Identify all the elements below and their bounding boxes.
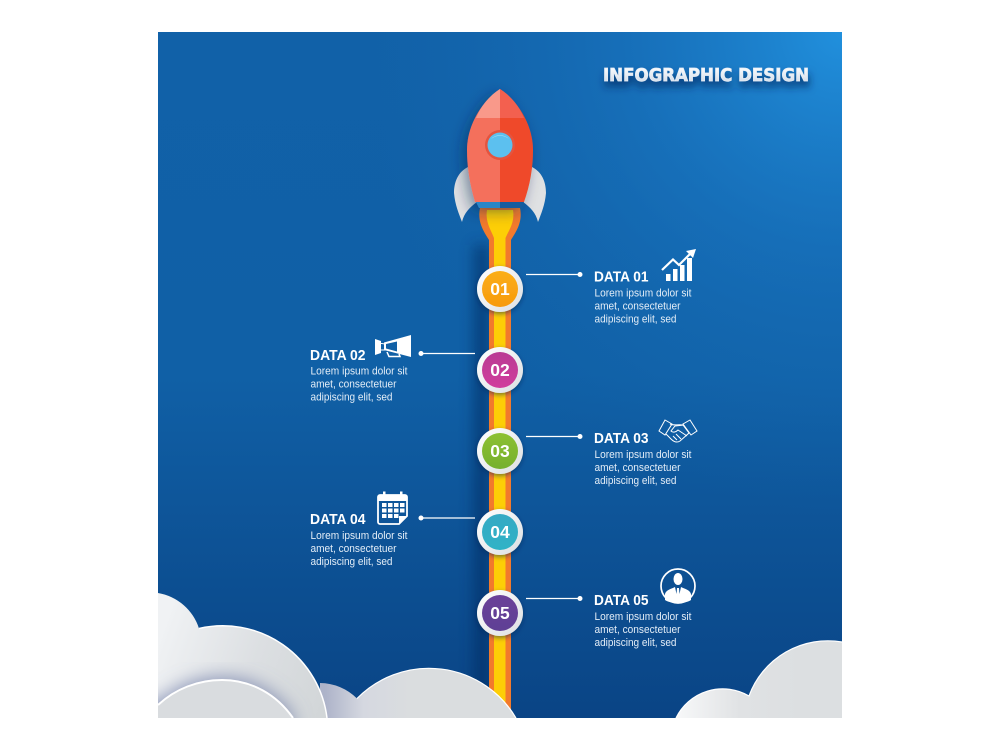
step 04: [310, 492, 523, 568]
right cloud: [676, 641, 842, 718]
rocket exhaust stripe: [474, 208, 521, 725]
step 01: [477, 249, 696, 326]
left cloud: [158, 593, 328, 718]
icon: calendar: [378, 492, 407, 524]
text: data 04: DATA 04: [310, 511, 366, 528]
text: data 02: DATA 02: [310, 347, 366, 364]
text: data 03: amet, consectetuer: [594, 462, 681, 474]
text: data 04: Lorem ipsum dolor sit: [310, 530, 408, 542]
text: data 05: DATA 05: [594, 592, 648, 609]
text: data 02: [310, 347, 408, 404]
text: data 05: Lorem ipsum dolor sit: [594, 611, 692, 623]
text: data 02: adipiscing elit, sed: [310, 392, 392, 404]
connector 05: [526, 596, 582, 601]
badge 04: 04: [490, 522, 510, 542]
text: data 04: adipiscing elit, sed: [310, 556, 392, 568]
middle cloud: [320, 668, 516, 718]
text: data 01: DATA 01: [594, 269, 648, 286]
rocket window: [485, 130, 515, 160]
text: data 03: DATA 03: [594, 430, 648, 447]
connector 03: [526, 434, 582, 439]
text: data 05: [594, 592, 692, 649]
background panel: [158, 32, 842, 718]
badge 02: [477, 347, 523, 393]
badge 03: [477, 428, 523, 474]
badge 04: [477, 509, 523, 555]
icon: handshake: [659, 420, 697, 442]
step 02: [310, 335, 523, 404]
text: data 03: [594, 430, 692, 487]
text: data 05: amet, consectetuer: [594, 624, 681, 636]
text: data 05: adipiscing elit, sed: [594, 637, 676, 649]
icon: megaphone: [375, 335, 411, 357]
text: data 02: Lorem ipsum dolor sit: [310, 366, 408, 378]
badge 05: 05: [490, 603, 510, 623]
icon: growth chart: [662, 249, 696, 281]
text: data 03: adipiscing elit, sed: [594, 475, 676, 487]
text: data 04: [310, 511, 408, 568]
badge 02: 02: [490, 360, 510, 380]
badge 01: [477, 266, 523, 312]
clouds: [158, 593, 842, 718]
connector 04: [418, 516, 475, 520]
rocket fins: [454, 167, 546, 222]
icon: businessman: [661, 569, 695, 603]
text: data 02: amet, consectetuer: [310, 378, 397, 390]
text: data 01: [594, 269, 692, 326]
step 05: [477, 569, 695, 649]
text: data 01: adipiscing elit, sed: [594, 314, 676, 326]
text: data 01: amet, consectetuer: [594, 300, 681, 312]
badge 01: 01: [490, 279, 510, 299]
badge 05: [477, 590, 523, 636]
badge 03: 03: [490, 441, 510, 461]
title: INFOGRAPHIC DESIGN: [603, 66, 809, 86]
step 03: [477, 420, 697, 487]
connector 02: [418, 351, 475, 356]
rocket body: [467, 89, 533, 208]
text: data 03: Lorem ipsum dolor sit: [594, 449, 692, 461]
rocket: [454, 89, 546, 222]
connector 01: [526, 272, 582, 277]
text: data 01: Lorem ipsum dolor sit: [594, 288, 692, 300]
text: data 04: amet, consectetuer: [310, 543, 397, 555]
